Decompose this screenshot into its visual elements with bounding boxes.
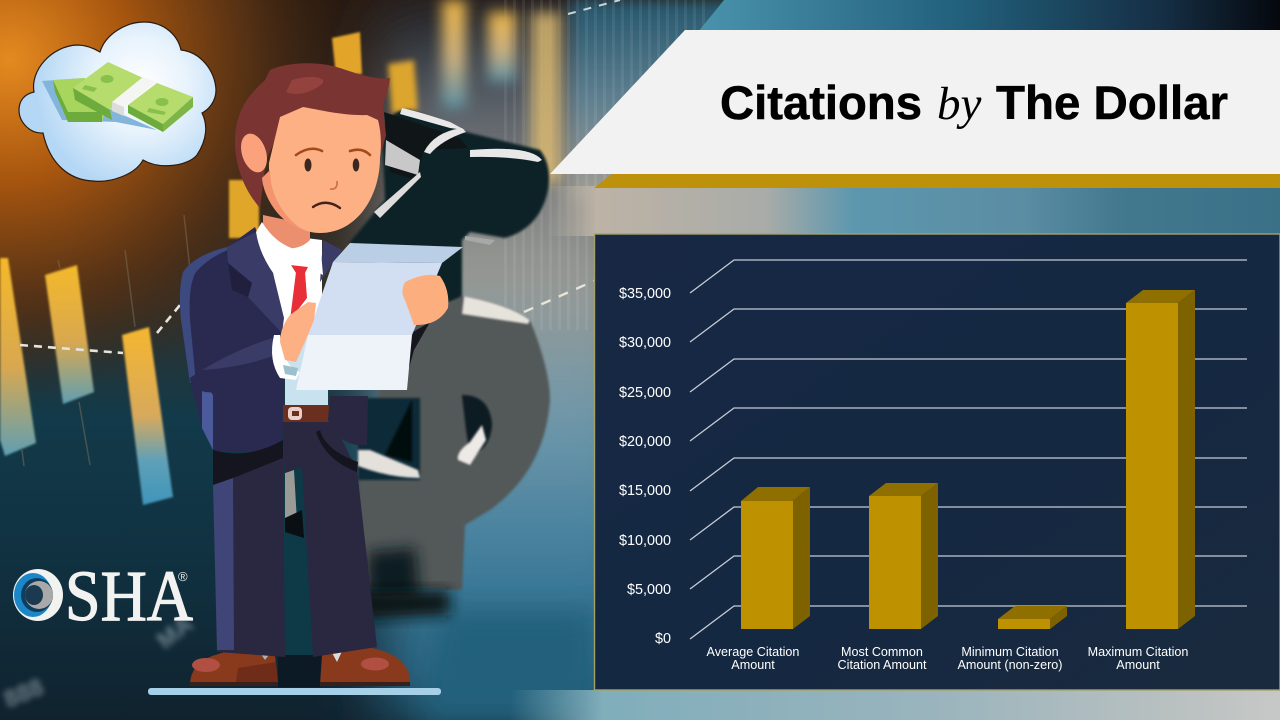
- category labels: [707, 645, 1188, 672]
- trousers: [213, 420, 377, 657]
- bar: average citation: [741, 487, 810, 629]
- title: Citations: [720, 76, 922, 129]
- y axis labels: $0: [655, 631, 671, 647]
- illustration: businessman reading paper: [148, 63, 463, 695]
- blurred ticker text: [0, 610, 198, 714]
- gold accent bar: [594, 174, 1280, 188]
- lining: [213, 440, 283, 485]
- y axis labels: $20,000: [619, 434, 671, 450]
- panel: bar chart: [594, 234, 1280, 690]
- lapel: [227, 232, 284, 333]
- y axis labels: $5,000: [627, 582, 671, 598]
- category labels: Amount: [731, 658, 775, 672]
- category labels: Amount (non-zero): [958, 658, 1062, 672]
- title banner: The Dollar: [996, 76, 1228, 129]
- nose and mouth: [330, 181, 337, 189]
- eyes: [304, 158, 312, 172]
- right jacket panel: [328, 396, 368, 445]
- logo: OSHA: SHA: [65, 556, 193, 636]
- icon: thought cloud with cash: [19, 22, 216, 181]
- paper: [296, 243, 463, 390]
- brows: [296, 149, 370, 155]
- category labels: Average Citation: [707, 645, 799, 659]
- bar: minimum citation: [998, 606, 1067, 629]
- y axis labels: [619, 286, 671, 647]
- chart grid lines: [690, 260, 1247, 639]
- belt: [283, 405, 330, 422]
- title banner: by: [937, 78, 982, 130]
- y axis labels: $25,000: [619, 385, 671, 401]
- category labels: Maximum Citation: [1088, 645, 1188, 659]
- neck: [263, 215, 310, 248]
- shoes: [190, 642, 410, 686]
- bar: maximum citation: [1126, 290, 1195, 629]
- bar: most common citation: [869, 483, 938, 629]
- jacket: [180, 227, 430, 485]
- category labels: Most Common: [841, 645, 923, 659]
- tie: [290, 255, 308, 320]
- y axis labels: $10,000: [619, 533, 671, 549]
- hair: [235, 63, 390, 208]
- collar: [256, 222, 323, 282]
- y axis labels: $15,000: [619, 483, 671, 499]
- cuff: [272, 335, 300, 380]
- category labels: Amount: [1116, 658, 1160, 672]
- shirt: [256, 232, 328, 405]
- hand left: [280, 302, 316, 362]
- gap between legs: [278, 462, 322, 687]
- ear: [236, 130, 272, 176]
- icon: cash bundles: [42, 62, 193, 132]
- blurred ticker text: MA: [152, 610, 198, 655]
- y axis labels: $35,000: [619, 286, 671, 302]
- category labels: Minimum Citation: [961, 645, 1059, 659]
- icon: metallic dollar sign: [340, 108, 550, 620]
- face: [269, 107, 381, 233]
- logo: OSHA: [13, 556, 193, 636]
- title banner: [550, 30, 1280, 188]
- y axis labels: $30,000: [619, 335, 671, 351]
- category labels: Citation Amount: [838, 658, 927, 672]
- floor line: [148, 688, 441, 695]
- blurred ticker text: 888: [0, 674, 47, 714]
- logo: OSHA: ®: [178, 569, 188, 584]
- sleeve: [190, 335, 280, 392]
- candlesticks: [0, 0, 620, 505]
- hand right: [402, 275, 448, 325]
